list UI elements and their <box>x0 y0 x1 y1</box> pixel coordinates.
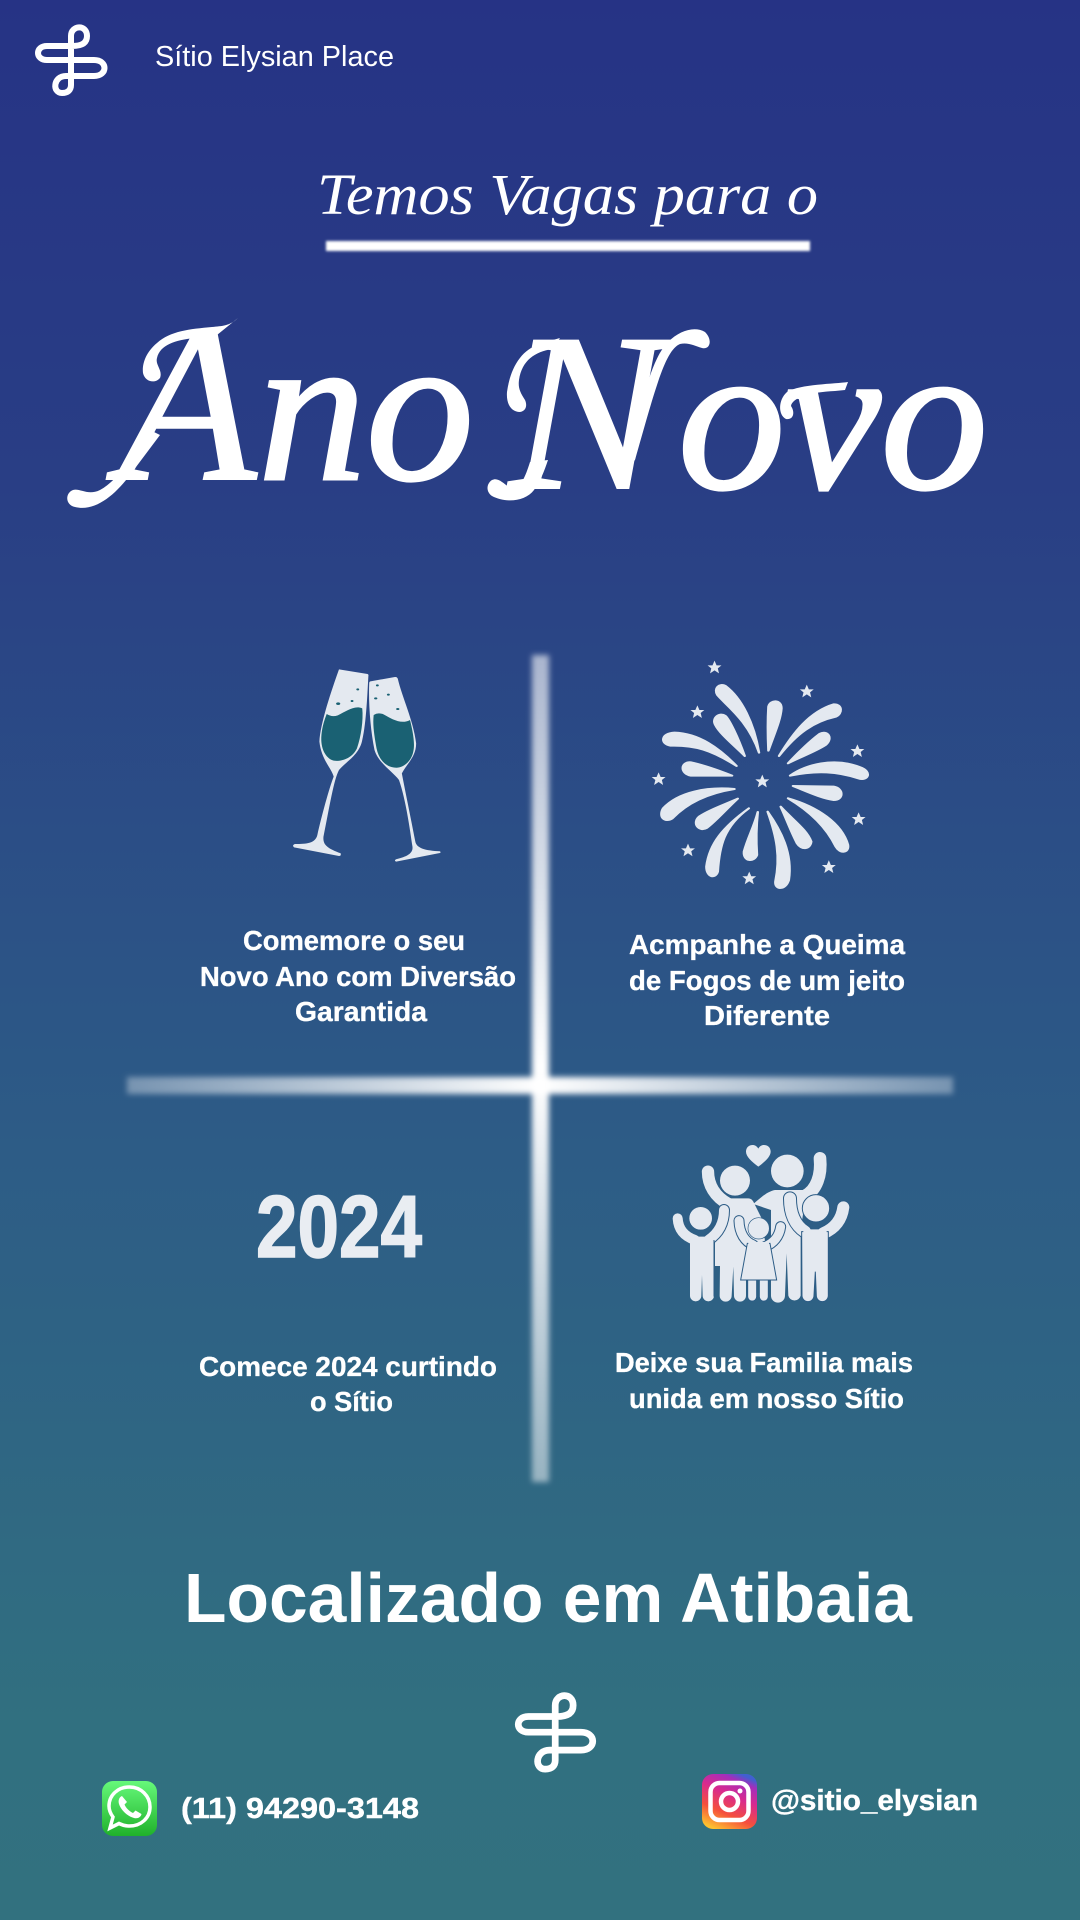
text: deixe sua familia <box>615 1347 913 1414</box>
text: comece 2024: o Sítio <box>310 1386 393 1417</box>
text: queima de fogos: Acmpanhe a Queima <box>629 929 905 960</box>
icon: fireworks <box>652 661 868 888</box>
icon: family <box>678 1145 843 1303</box>
girl <box>739 1218 781 1301</box>
title: Ano Novo: A <box>106 278 258 528</box>
heart <box>746 1145 771 1167</box>
icon: champagne glasses <box>293 669 441 862</box>
heading underline <box>326 241 810 251</box>
flourishes <box>143 318 238 381</box>
text: comemore: Garantida <box>295 996 427 1027</box>
kid left <box>678 1207 724 1301</box>
text: deixe sua familia: unida em nosso Sítio <box>629 1383 904 1414</box>
text: queima de fogos: Diferente <box>704 1000 830 1031</box>
instagram handle: @sitio_elysian <box>771 1785 978 1817</box>
phone number: (11) 94290-3148 <box>181 1793 419 1825</box>
logo: top <box>38 27 104 93</box>
logo: bottom <box>518 1696 593 1769</box>
horizontal divider <box>127 1077 953 1094</box>
text: queima de fogos <box>629 929 905 1031</box>
title: Ano Novo: N <box>507 287 675 537</box>
heading: Temos Vagas para o: Temos Vagas para o <box>317 162 818 227</box>
location heading: Localizado em Atibaia <box>184 1559 913 1637</box>
big year 2024: 2024 <box>256 1177 422 1276</box>
text: comece 2024 <box>199 1351 497 1417</box>
woman <box>708 1166 768 1302</box>
icon: instagram <box>702 1774 757 1829</box>
title: Ano Novo: no <box>258 290 474 525</box>
title: Ano Novo <box>67 278 988 537</box>
text: comemore: Comemore o seu <box>243 925 465 956</box>
icon: whatsapp <box>102 1781 157 1836</box>
text: comece 2024: Comece 2024 curtindo <box>199 1351 497 1382</box>
brand name: Sítio Elysian Place <box>155 41 394 73</box>
title: Ano Novo: ovo <box>678 299 988 534</box>
man <box>753 1155 820 1303</box>
vertical divider <box>532 655 549 1482</box>
text: queima de fogos: de Fogos de um jeito <box>629 965 905 996</box>
text: comemore <box>200 925 516 1027</box>
text: deixe sua familia: Deixe sua Familia mais <box>615 1347 913 1378</box>
text: comemore: Novo Ano com Diversão <box>200 961 516 992</box>
kid right <box>790 1195 843 1302</box>
